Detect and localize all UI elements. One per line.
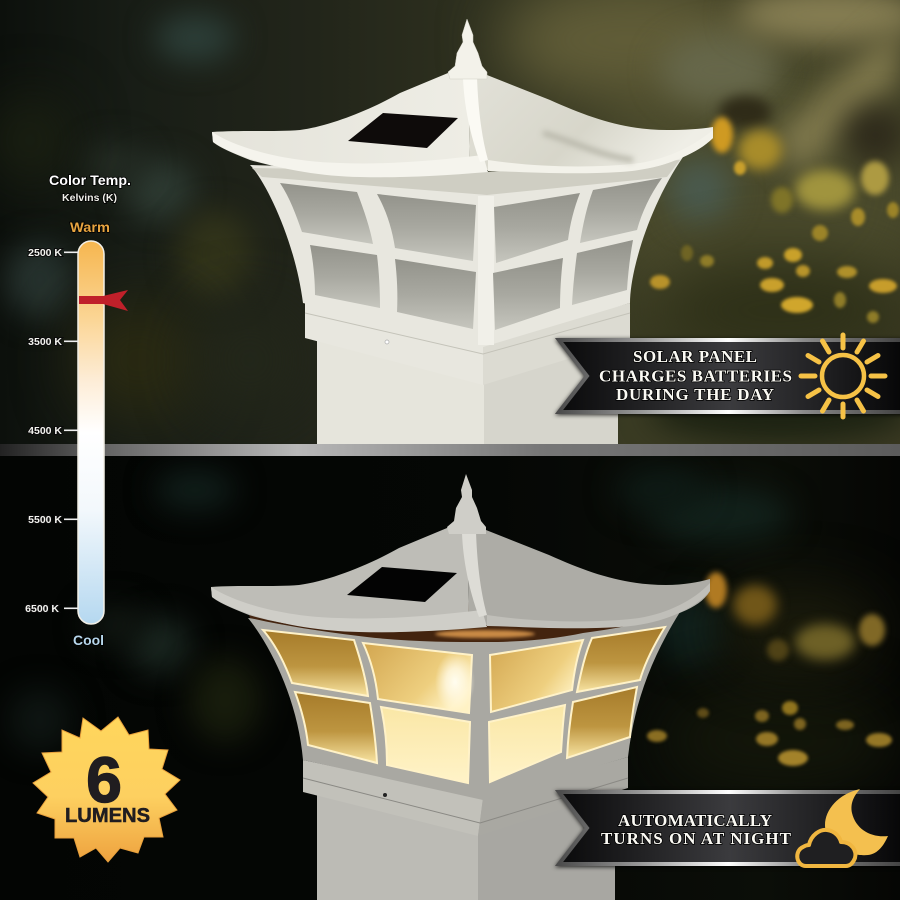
tick marks and labels: 5500 K <box>28 514 62 526</box>
roof <box>212 73 713 177</box>
night solar panel <box>347 567 457 602</box>
callout: solar charging <box>559 335 900 417</box>
banner ribbon <box>559 340 900 412</box>
chart: color temperature scale <box>25 173 131 648</box>
banner text: DURING THE DAY <box>616 385 774 404</box>
roof underside <box>249 605 623 642</box>
panel: daytime scene <box>0 0 900 450</box>
frosted glass panes <box>280 178 662 330</box>
banner text: CHARGES BATTERIES <box>599 366 792 386</box>
night base skirt <box>303 757 628 836</box>
night garden background <box>0 455 900 900</box>
night post <box>317 790 615 900</box>
lamp frame <box>250 157 683 347</box>
red marker arrow <box>79 290 128 311</box>
night flowers <box>647 572 892 766</box>
scale title: Color Temp. <box>49 173 131 188</box>
banner ribbon <box>559 792 900 864</box>
divider bar <box>0 444 900 456</box>
daytime garden background <box>0 0 900 445</box>
thermometer bar <box>78 241 104 624</box>
banner text <box>601 811 792 848</box>
tick marks and labels: 6500 K <box>25 603 59 615</box>
cool label: Cool <box>73 633 104 648</box>
badge: 6 lumens <box>33 717 180 862</box>
starburst <box>33 717 180 862</box>
lumens label: LUMENS <box>65 804 150 827</box>
underside warm highlight <box>435 630 535 638</box>
tick marks and labels: 4500 K <box>28 425 62 437</box>
night roof <box>211 528 710 632</box>
banner text: AUTOMATICALLY <box>618 811 772 830</box>
number: 6 <box>86 744 122 816</box>
tick marks and labels <box>25 247 78 615</box>
panel: night scene <box>0 455 900 900</box>
banner text: SOLAR PANEL <box>633 347 757 366</box>
solar panel <box>348 113 458 148</box>
yellow flowers <box>650 117 899 323</box>
lamp base skirt <box>305 303 630 385</box>
post <box>317 340 618 450</box>
icon: cloud <box>797 830 855 866</box>
bulb glow <box>436 654 474 706</box>
warm label: Warm <box>70 220 110 235</box>
banner text <box>599 347 792 404</box>
icon: sun <box>801 335 885 417</box>
tick marks and labels: 2500 K <box>28 247 62 259</box>
illuminated panes <box>263 627 665 783</box>
tick marks and labels: 3500 K <box>28 336 62 348</box>
banner text: TURNS ON AT NIGHT <box>601 829 792 848</box>
callout: automatic night light <box>559 789 900 866</box>
scale subtitle: Kelvins (K) <box>62 193 117 204</box>
night frame <box>248 612 680 800</box>
icon: moon <box>825 789 888 855</box>
night finial <box>447 474 486 534</box>
finial <box>448 19 487 79</box>
